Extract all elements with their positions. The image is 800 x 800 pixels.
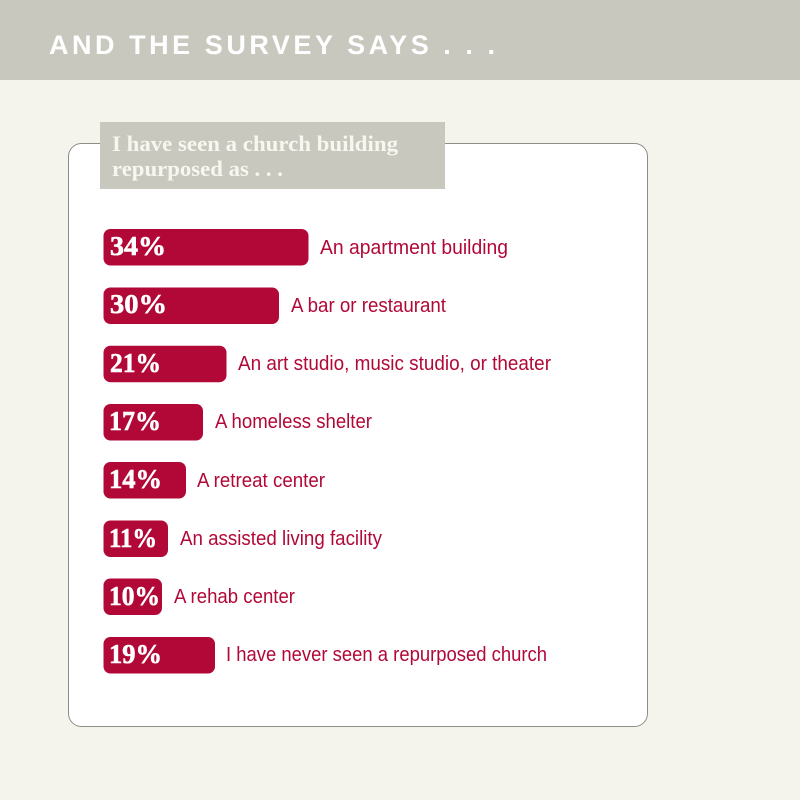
bar: assisted living 11% [104,520,382,557]
bar chart [104,229,551,674]
bar: retreat center 14% [104,462,325,498]
bar: rehab center 10% [104,578,295,615]
header banner [0,0,800,80]
bar: retreat center 14%: 14% [109,464,162,494]
panel: survey results [68,122,648,726]
bar: bar or restaurant 30%: 30% [110,289,167,319]
bar: rehab center 10%: A rehab center [174,586,295,608]
panel heading: I have seen a church building [112,131,399,156]
bar: never seen 19%: 19% [109,639,162,669]
bar: bar or restaurant 30%: A bar or restaurant [291,295,446,317]
bar: apartment building 34%: An apartment building [320,237,508,259]
bar: art studio 21%: 21% [110,348,161,378]
bar: apartment building 34%: 34% [110,231,166,261]
bar: art studio 21%: An art studio, music studio, or theater [238,353,551,375]
bar: assisted living 11%: 11% [109,523,157,553]
panel heading [100,122,445,189]
bar: bar or restaurant 30% [104,288,446,324]
bar: never seen 19%: I have never seen a repurposed church [226,644,547,666]
bar: never seen 19% [104,637,547,674]
bar: art studio 21% [104,346,551,382]
panel heading: repurposed as . . . [112,156,283,181]
bar: homeless shelter 17% [104,404,372,440]
bar: rehab center 10%: 10% [109,581,160,611]
bar: homeless shelter 17%: A homeless shelter [215,411,372,433]
title: AND THE SURVEY SAYS . . . [49,30,495,60]
bar: assisted living 11%: An assisted living facility [180,528,382,550]
bar: apartment building 34% [104,229,508,266]
bar: homeless shelter 17%: 17% [109,406,161,436]
bar: retreat center 14%: A retreat center [197,470,325,492]
